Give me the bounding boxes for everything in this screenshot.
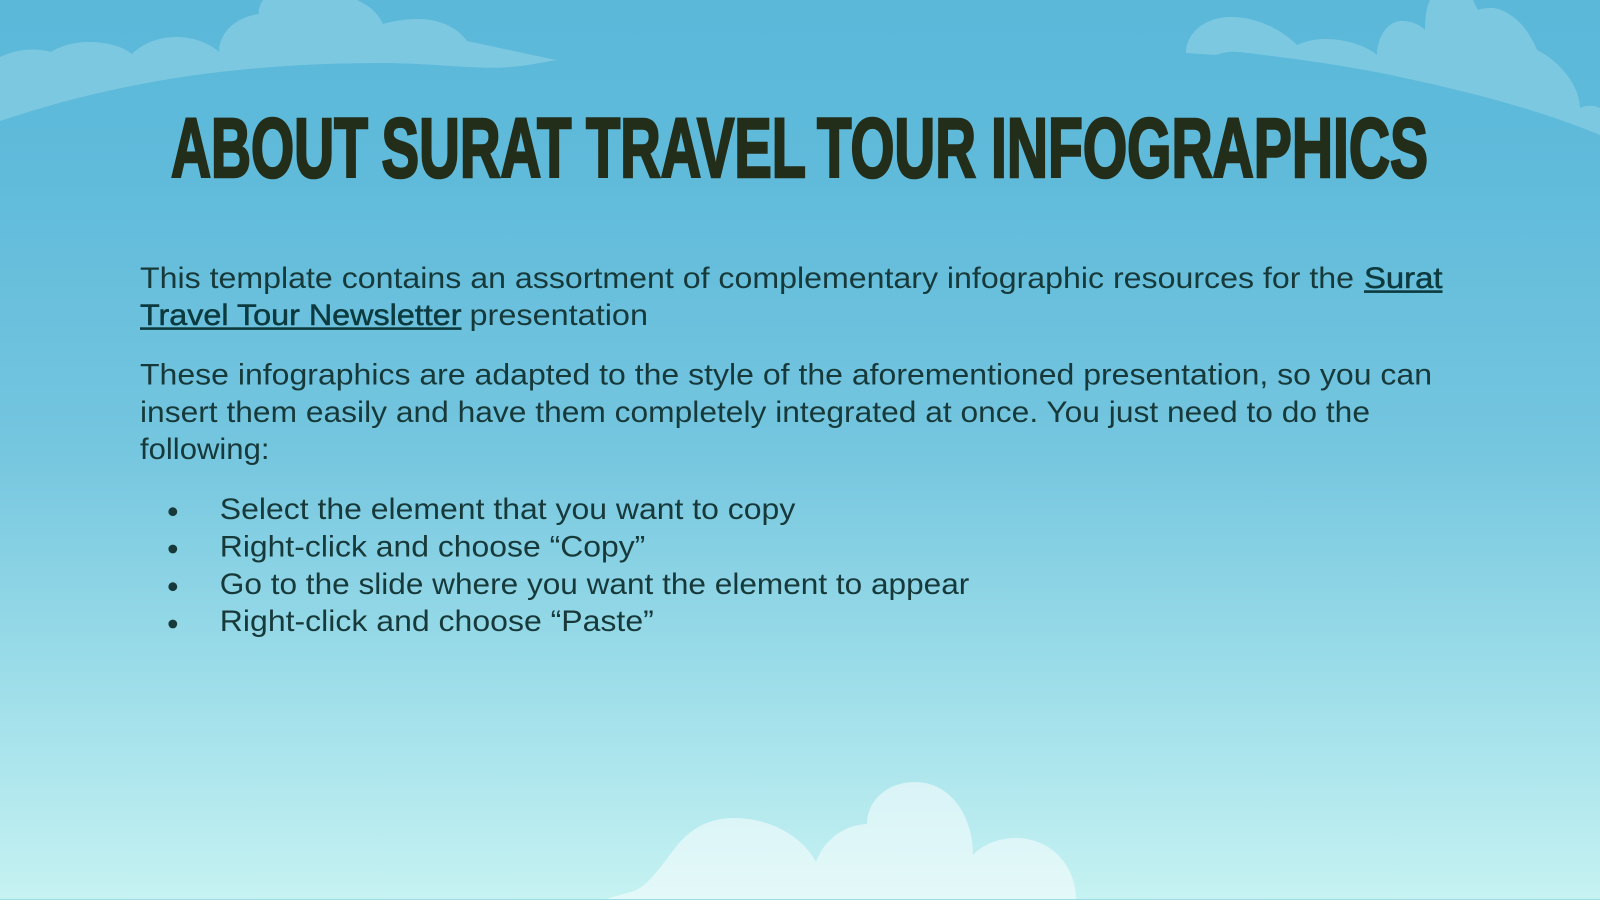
instructions paragraph: following:: [140, 433, 270, 466]
intro paragraph: [140, 262, 1443, 332]
bottom edge line: [0, 899, 1600, 900]
instructions paragraph: insert them easily and have them completely integrated at once. You just need to do the: [140, 396, 1370, 429]
title: SURAT: [382, 101, 572, 195]
cloud: top right: [1186, 0, 1600, 135]
intro paragraph: presentation: [470, 299, 648, 332]
title: ABOUT: [171, 101, 368, 195]
intro paragraph: Travel Tour Newsletter: [140, 299, 462, 332]
bullet list of steps: Right-click and choose “Paste”: [220, 605, 654, 638]
bullet list of steps: Right-click and choose “Copy”: [220, 530, 645, 564]
instructions paragraph: [140, 358, 1432, 466]
title: TOUR: [817, 101, 976, 195]
instructions paragraph: These infographics are adapted to the style of the aforementioned presentation, so you can: [140, 358, 1432, 392]
title: TRAVEL: [586, 101, 806, 195]
bullet list of steps: [168, 493, 969, 638]
bullet list of steps: Select the element that you want to copy: [220, 493, 795, 526]
bullet list of steps: Go to the slide where you want the element to appear: [220, 568, 969, 601]
intro paragraph: Surat: [1364, 262, 1443, 295]
cloud: top left: [0, 0, 556, 121]
intro paragraph: This template contains an assortment of complementary infographic resources for the: [140, 262, 1354, 295]
cloud: bottom centre: [606, 782, 1076, 899]
title: [171, 101, 1428, 195]
